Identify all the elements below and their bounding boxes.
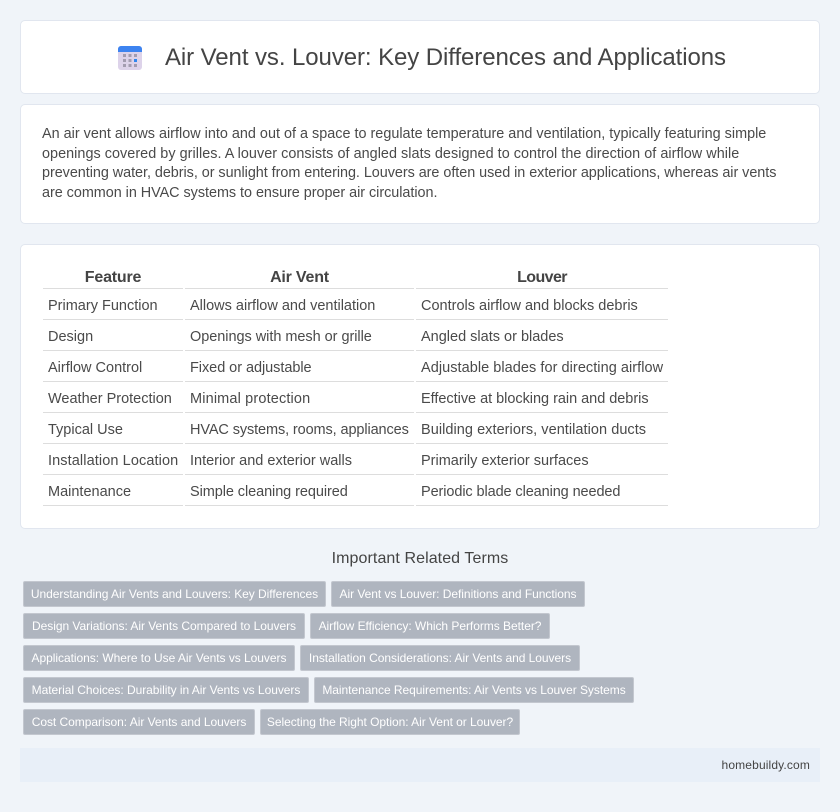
comparison table: Typical Use: [48, 422, 123, 438]
comparison table: Maintenance: [48, 484, 131, 500]
comparison table: Angled slats or blades: [421, 329, 564, 345]
comparison table: Building exteriors, ventilation ducts: [421, 422, 646, 438]
comparison table: [43, 269, 668, 506]
related terms tags: Airflow Efficiency: Which Performs Better?: [319, 619, 541, 633]
related terms tags: Installation Considerations: Air Vents and Louvers: [309, 651, 571, 665]
comparison table: Effective at blocking rain and debris: [421, 391, 649, 407]
comparison table: Weather Protection: [48, 391, 172, 407]
related terms tags: Material Choices: Durability in Air Vents vs Louvers: [32, 683, 300, 697]
related terms tags: Cost Comparison: Air Vents and Louvers: [32, 715, 246, 729]
related terms tags: Understanding Air Vents and Louvers: Key Differences: [31, 587, 318, 601]
comparison table: Fixed or adjustable: [190, 360, 312, 376]
comparison table: HVAC systems, rooms, appliances: [190, 422, 409, 438]
comparison table: Installation Location: [48, 453, 178, 469]
footer site name: homebuildy.com: [722, 758, 810, 772]
related terms tags: Design Variations: Air Vents Compared to Louvers: [32, 619, 296, 633]
comparison table: Openings with mesh or grille: [190, 329, 372, 345]
comparison table: Minimal protection: [190, 391, 310, 407]
intro paragraph: openings covered by grilles. A louver consists of angled slats designed to control the direction of airflow while: [42, 146, 739, 162]
comparison table: Primary Function: [48, 298, 158, 314]
related terms tags: Air Vent vs Louver: Definitions and Functions: [340, 587, 576, 601]
comparison table: Air Vent: [270, 269, 329, 286]
icon: calendar: [118, 46, 142, 70]
intro paragraph: [42, 126, 776, 201]
comparison table panel: [20, 244, 820, 529]
header panel: [20, 20, 820, 94]
related terms tags: Selecting the Right Option: Air Vent or Louver?: [267, 715, 513, 729]
intro text panel: [20, 104, 820, 224]
comparison table: Airflow Control: [48, 360, 142, 376]
intro paragraph: preventing water, debris, or sunlight from entering. Louvers are often used in exterior applications, whereas air vents: [42, 165, 776, 181]
title: Air Vent vs. Louver: Key Differences and Applications: [165, 44, 726, 71]
related terms tags: Applications: Where to Use Air Vents vs Louvers: [32, 651, 286, 665]
comparison table: Periodic blade cleaning needed: [421, 484, 620, 500]
intro paragraph: An air vent allows airflow into and out of a space to regulate temperature and ventilation, typically featuring simple: [42, 126, 766, 142]
comparison table: Feature: [85, 269, 141, 286]
intro paragraph: are common in HVAC systems to ensure proper air circulation.: [42, 185, 437, 201]
comparison table: Simple cleaning required: [190, 484, 348, 500]
comparison table: Controls airflow and blocks debris: [421, 298, 638, 314]
comparison table: Primarily exterior surfaces: [421, 453, 589, 469]
related terms tags: [23, 581, 634, 735]
related terms heading: Important Related Terms: [332, 550, 508, 567]
comparison table: Interior and exterior walls: [190, 453, 352, 469]
related terms tags: Maintenance Requirements: Air Vents vs Louver Systems: [322, 683, 626, 697]
comparison table: Design: [48, 329, 93, 345]
comparison table: Adjustable blades for directing airflow: [421, 360, 663, 376]
comparison table: Louver: [517, 269, 567, 286]
footer bar: [20, 748, 820, 782]
comparison table: Allows airflow and ventilation: [190, 298, 375, 314]
